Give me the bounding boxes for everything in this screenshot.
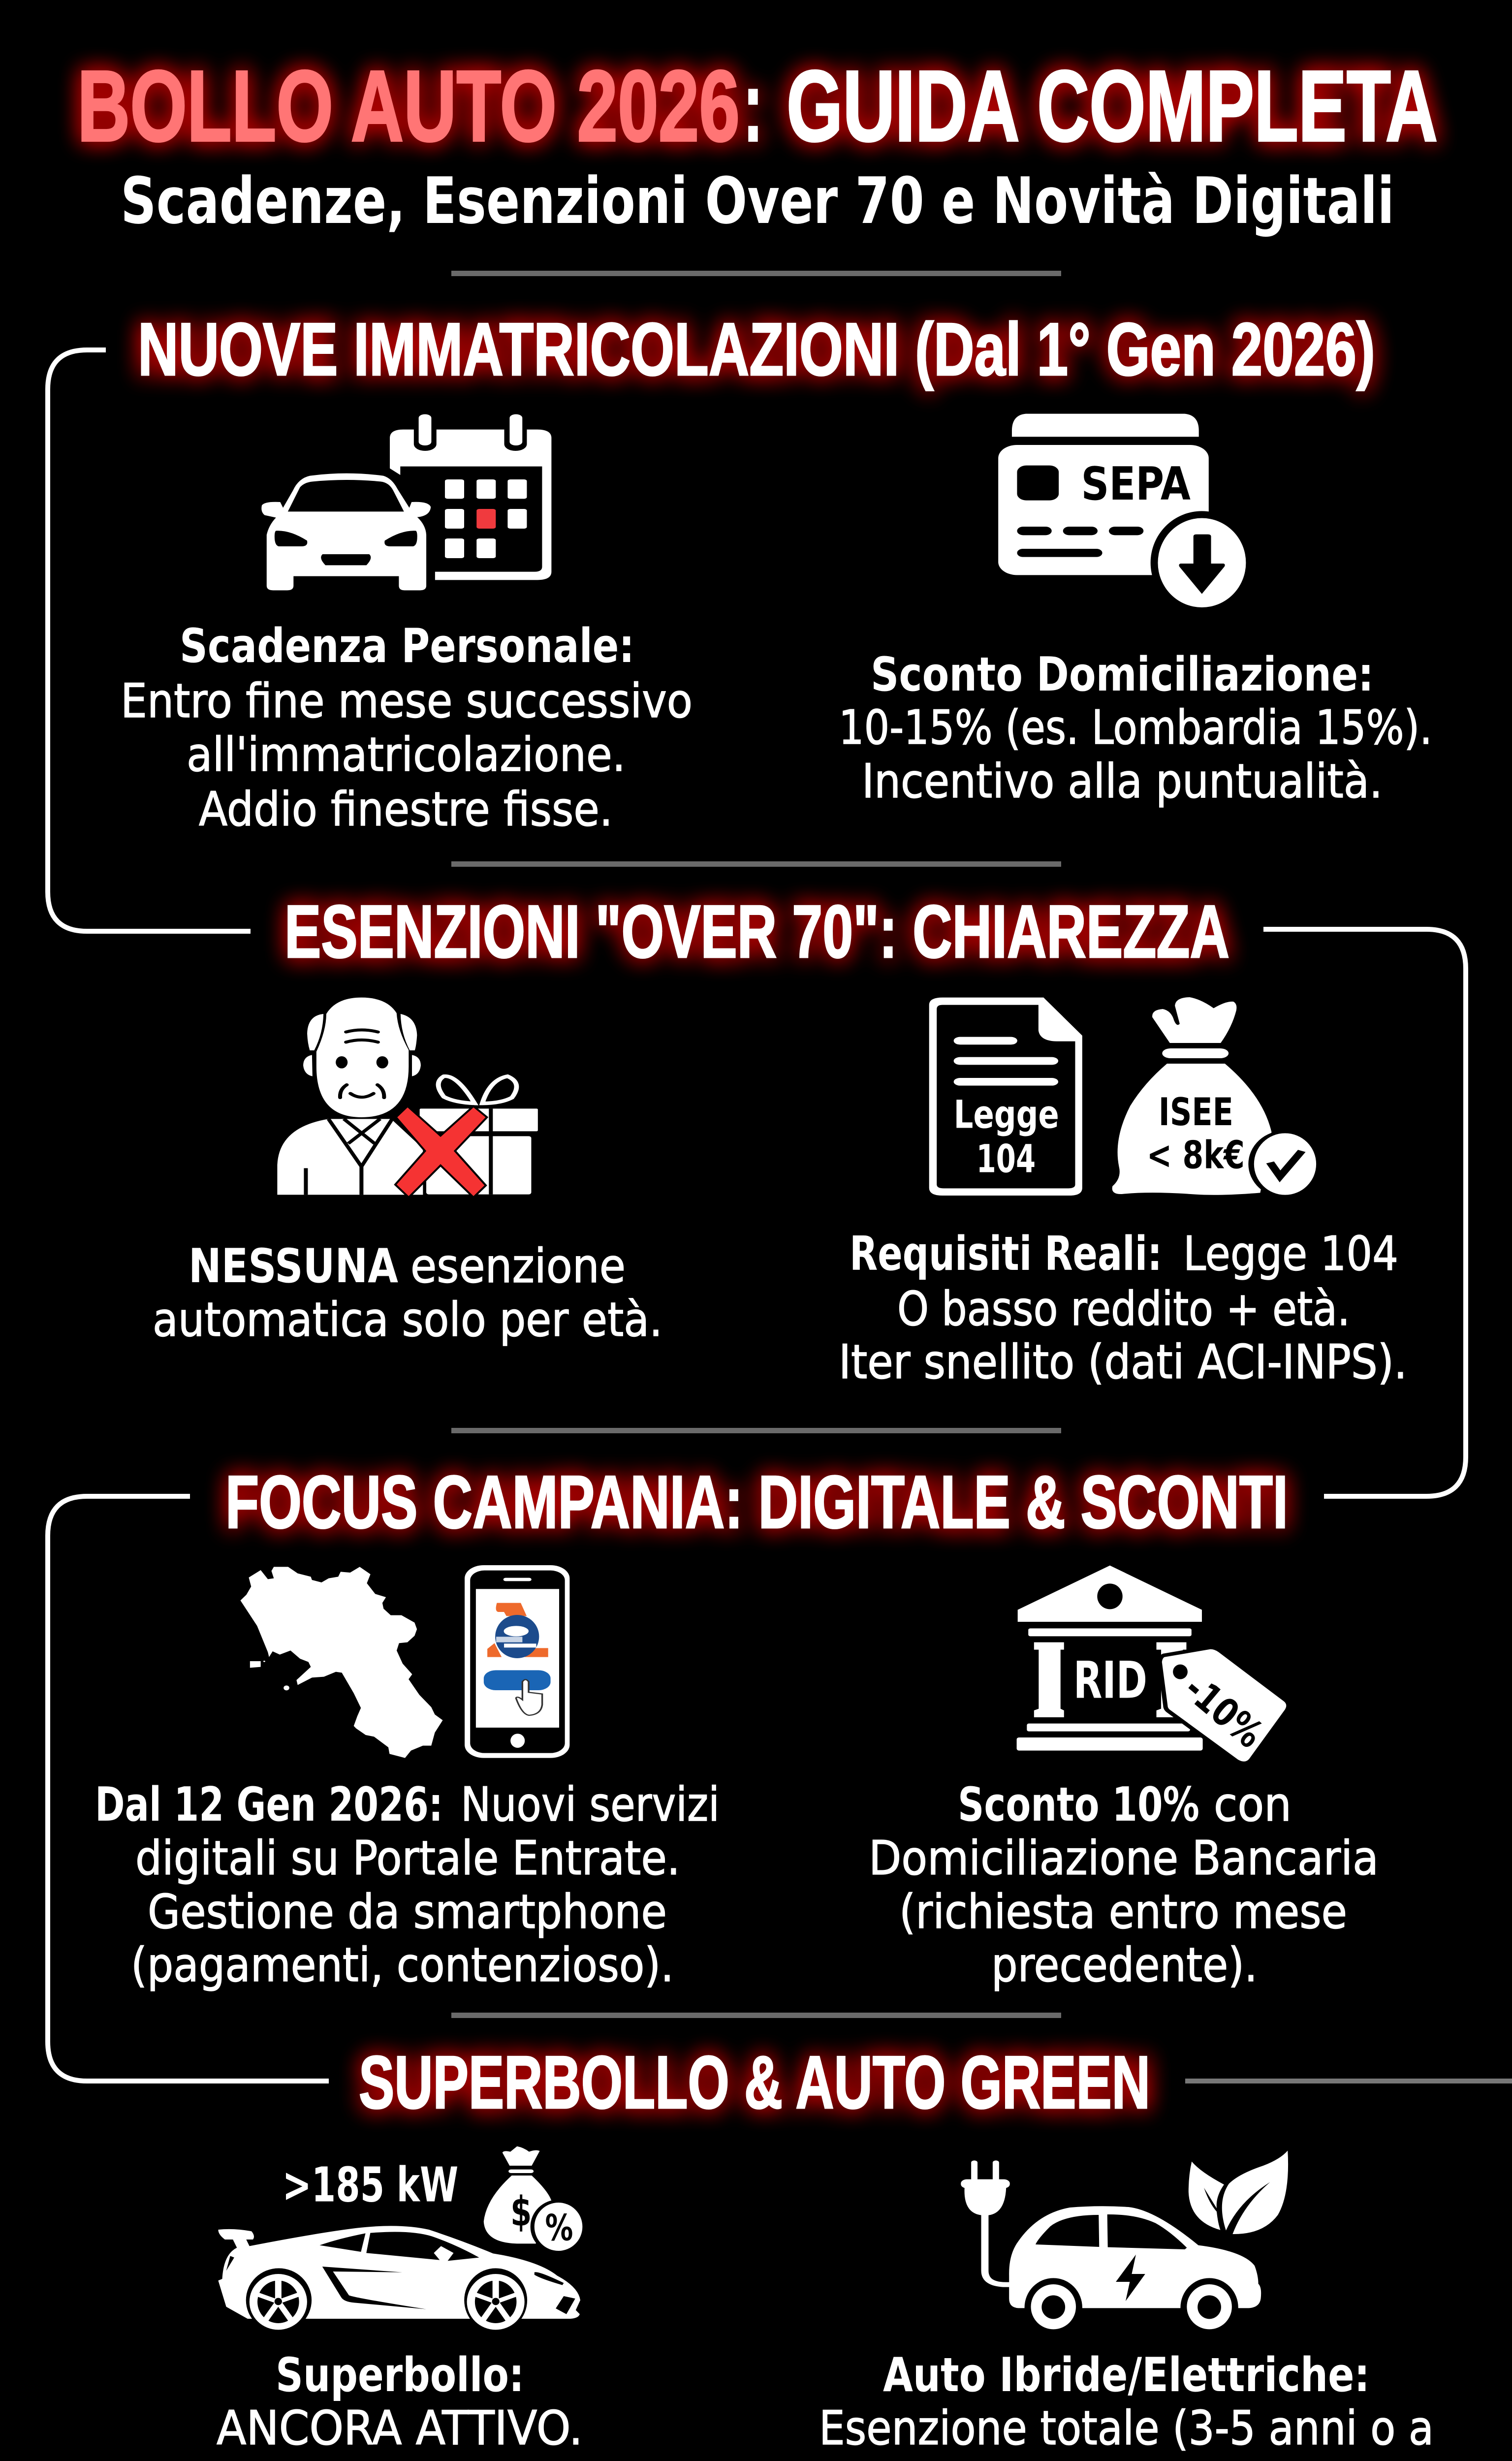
heading: superbollo e auto green: SUPERBOLLO & AUTO GREEN [359,2041,1150,2124]
icon: ISEE money bag: < 8k€ [1147,1133,1245,1177]
connector: section 2 to section 3 [1263,929,1466,1496]
title [77,50,1438,162]
icon: legge 104 document: 104 [976,1136,1036,1182]
icon: bank with RID and discount tag: RID [1073,1651,1147,1710]
text: sconto domiciliazione [839,648,1432,809]
panel: superbollo e auto green [167,2041,1434,2461]
icon: legge 104 document [929,998,1082,1196]
text: auto ibride elettriche: Esenzione totale (3-5 anni o a [819,2401,1434,2456]
icon: legge 104 document: Legge [954,1092,1059,1137]
connector: section 4 outgoing line [1185,2079,1512,2083]
text: sconto 10%: con [1214,1778,1292,1832]
icon: ISEE money bag: ISEE [1159,1090,1233,1134]
connector: section 3 to section 4 [48,1496,329,2081]
icon: campania map [240,1567,442,1758]
icon: electric car with plug and leaves [961,2150,1288,2337]
text: nessuna esenzione: NESSUNA [189,1239,398,1294]
icon: SEPA card: SEPA [1081,458,1191,511]
connector: section 1 to section 2 [48,350,251,931]
icon: ISEE money bag [1112,997,1322,1198]
icon: SEPA card [998,414,1253,614]
title: : [743,50,763,162]
text: requisiti reali [839,1227,1407,1389]
text: sconto domiciliazione: Incentivo alla puntualità. [862,755,1383,809]
icon: sports car with power label and money bag: $ [510,2188,532,2236]
text: dal 12 gen 2026: digitali su Portale Entrate. [135,1831,680,1886]
icon: car and calendar [261,410,551,590]
text: dal 12 gen 2026: Gestione da smartphone [148,1885,667,1939]
panel: nuove immatricolazioni [121,308,1432,867]
icon: sports car with power label and money bag: % [545,2207,573,2249]
text: nessuna esenzione [153,1239,662,1347]
icon: elderly man and crossed gift [277,998,538,1196]
text: sconto 10% [869,1778,1379,1992]
icon: bank with RID and discount tag [1017,1566,1286,1762]
text: auto ibride elettriche [819,2348,1434,2461]
text: scadenza personale: all'immatricolazione. [187,728,626,782]
text: requisiti reali: Requisiti Reali: [850,1227,1162,1281]
text: sconto 10%: Sconto 10% [958,1778,1199,1832]
text: sconto 10%: precedente). [991,1938,1258,1992]
text: requisiti reali: Iter snellito (dati ACI-INPS). [839,1335,1407,1389]
text: sconto 10%: (richiesta entro mese [899,1885,1347,1939]
title: BOLLO AUTO 2026 [77,50,740,162]
text: dal 12 gen 2026: Nuovi servizi [461,1778,720,1832]
text: scadenza personale: Entro fine mese successivo [121,674,693,728]
text: superbollo [167,2348,632,2461]
icon: sports car with power label and money bag [218,2146,586,2332]
icon: sports car with power label and money bag: >185 kW [282,2157,458,2213]
text: sconto domiciliazione: Sconto Domiciliazione: [871,648,1374,702]
text: scadenza personale: Addio finestre fisse. [199,783,613,837]
panel: esenzioni over 70 [153,890,1407,1433]
text: dal 12 gen 2026: (pagamenti, contenzioso). [131,1938,674,1992]
panel: focus campania [95,1460,1379,2018]
text: superbollo: ANCORA ATTIVO. [217,2401,583,2456]
text: requisiti reali: O basso reddito + età. [897,1282,1350,1336]
icon: bank with RID and discount tag: -10% [1176,1667,1271,1757]
text: nessuna esenzione: automatica solo per età. [153,1293,662,1347]
text: auto ibride elettriche: Auto Ibride/Elettriche: [883,2348,1370,2402]
text: dal 12 gen 2026: Dal 12 Gen 2026: [95,1778,443,1832]
text: scadenza personale: Scadenza Personale: [180,619,634,673]
text: nessuna esenzione: esenzione [410,1239,626,1294]
text: requisiti reali: Legge 104 [1183,1227,1398,1281]
icon: smartphone with agenzia entrate logo [465,1565,569,1758]
text: scadenza personale [121,619,693,837]
text: dal 12 gen 2026 [95,1778,720,1992]
text: sconto 10%: Domiciliazione Bancaria [869,1831,1379,1886]
text: superbollo: Superbollo: [276,2348,524,2402]
